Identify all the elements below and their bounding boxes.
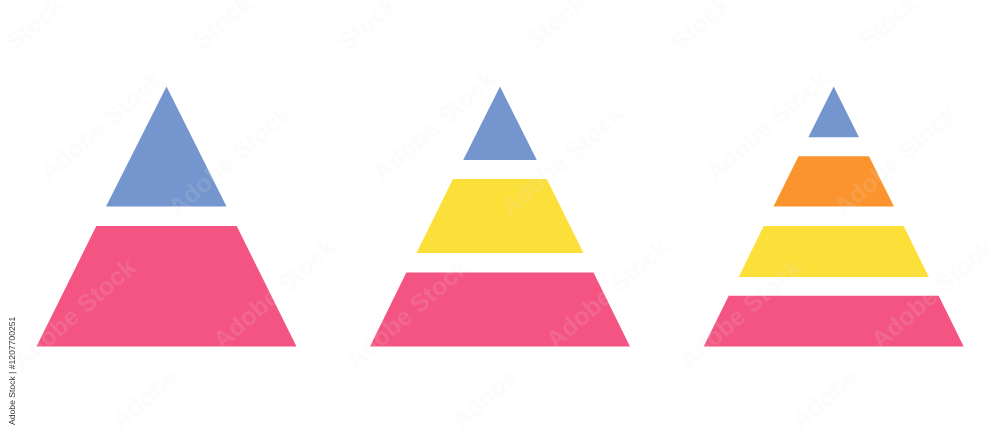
watermark pattern: Adobe [446, 363, 523, 433]
watermark pattern: Adobe Stock [496, 100, 630, 222]
watermark pattern: Adobe [786, 363, 863, 433]
tier: blue apex [808, 86, 859, 137]
watermark pattern: Adobe Stock [341, 253, 475, 375]
watermark pattern: Adobe Stock [35, 65, 169, 187]
watermark pattern: Adobe Stock [701, 65, 835, 187]
tier: pink base [36, 226, 296, 346]
tier: pink base [370, 272, 630, 346]
watermark pattern: Adobe Stock [866, 233, 1000, 355]
tier: yellow middle [416, 179, 584, 253]
watermark pattern: Adobe Stock [541, 233, 675, 355]
watermark pattern: Adobe Stock [674, 253, 808, 375]
watermark pattern: Adobe Stock [8, 253, 142, 375]
watermark pattern: Adobe Stock [208, 233, 342, 355]
pyramid: four tiers [704, 86, 964, 346]
watermark pattern: Adobe Stock [829, 100, 963, 222]
watermark pattern: Adobe Stock [368, 65, 502, 187]
watermark pattern: Adobe Stock [163, 100, 297, 222]
tier: blue apex [106, 86, 226, 206]
tier: orange upper [774, 156, 894, 206]
pyramid: two tiers [36, 86, 296, 346]
tier: blue apex [463, 86, 537, 160]
tier: pink base [704, 296, 964, 346]
stock credit label: Adobe Stock | #1207700251 [7, 316, 17, 425]
tier: yellow lower [739, 226, 929, 277]
watermark pattern: Adobe [106, 363, 183, 433]
pyramid: three tiers [370, 86, 630, 346]
